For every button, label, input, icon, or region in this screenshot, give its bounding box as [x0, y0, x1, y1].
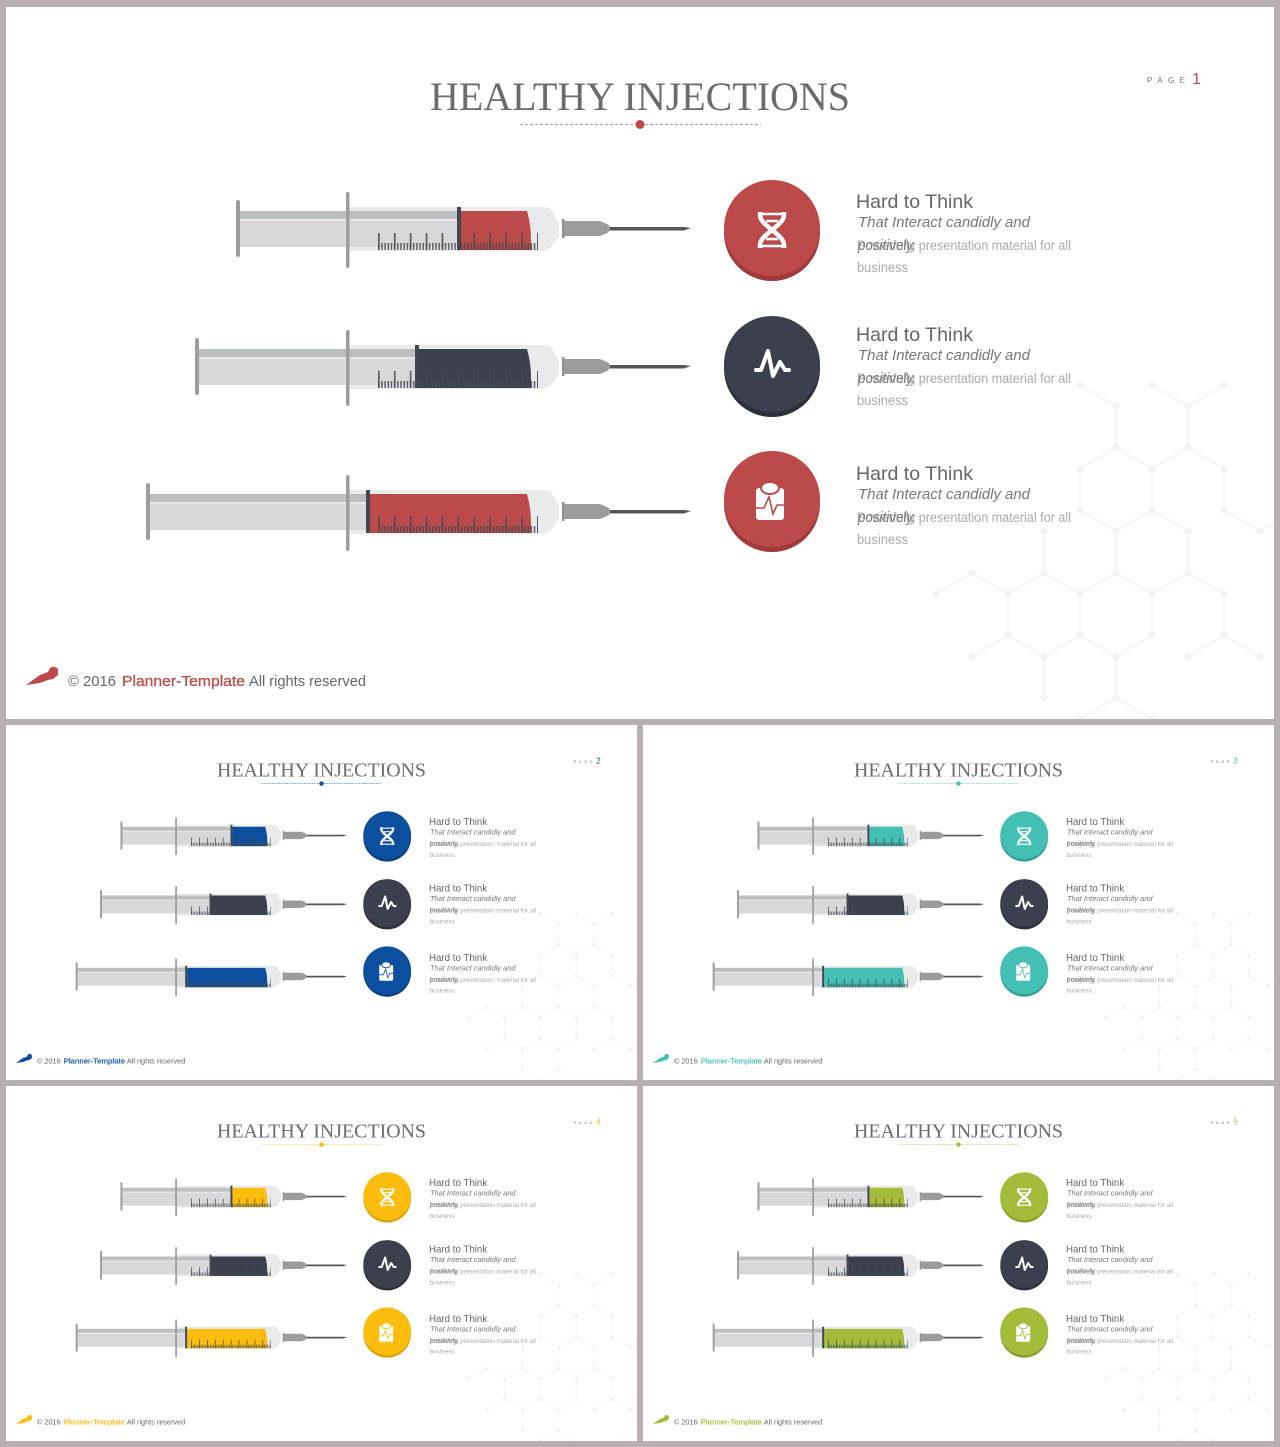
- footer: All rights reserved: [127, 1418, 185, 1427]
- text block 1: positively,: [857, 237, 916, 254]
- text block 2: business: [857, 393, 908, 408]
- text block 1: business: [429, 1213, 455, 1220]
- text block 2: positively,: [1066, 1266, 1096, 1275]
- text block 1: That Interact candidly and: [430, 828, 516, 837]
- footer: © 2016: [68, 673, 116, 690]
- page number: [1211, 1117, 1238, 1126]
- text block 3: business: [1066, 1349, 1092, 1356]
- icon: pulse circle: [363, 879, 411, 929]
- text block 2: Hard to Think: [429, 884, 487, 895]
- text block 1: positively,: [1066, 1200, 1096, 1209]
- text block 1: Hard to Think: [429, 1178, 487, 1189]
- icon: pulse circle: [363, 1240, 411, 1290]
- text block 3: Hard to Think: [856, 463, 973, 485]
- icon: pen logo: [16, 1054, 32, 1063]
- icon: pulse circle: [1000, 1240, 1048, 1290]
- title divider: [262, 781, 382, 786]
- page number: PAGE: [1211, 759, 1230, 764]
- syringe 2: [100, 1247, 347, 1285]
- syringe 3: [76, 1319, 347, 1357]
- icon: DNA circle: [724, 180, 820, 281]
- text block 2: That Interact candidly and: [430, 1255, 516, 1264]
- text block 1: Hard to Think: [429, 817, 487, 828]
- footer: [674, 1418, 822, 1427]
- text block 3: That Interact candidly and: [1067, 1324, 1153, 1333]
- hexagon molecule background: [1106, 913, 1275, 1080]
- text block 1: That Interact candidly and: [1067, 1189, 1153, 1198]
- footer: Planner-Template: [701, 1057, 762, 1066]
- text block 1: positively,: [429, 1200, 459, 1209]
- page number: 1: [1192, 71, 1201, 88]
- text block 1: business: [857, 260, 908, 275]
- title: HEALTHY INJECTIONS: [430, 74, 850, 119]
- text block 3: That Interact candidly and: [1067, 963, 1153, 972]
- text block 1: positively,: [1066, 839, 1096, 848]
- title: HEALTHY INJECTIONS: [217, 1120, 426, 1142]
- footer: Planner-Template: [122, 673, 245, 690]
- footer: © 2016: [674, 1057, 698, 1066]
- syringe 1: [236, 192, 691, 268]
- text block 3: positively,: [857, 509, 916, 526]
- text block 2: positively,: [429, 905, 459, 914]
- text block 2: business: [1066, 1279, 1092, 1286]
- icon: DNA circle: [363, 811, 411, 862]
- panel: slide 4 yellow: [6, 1086, 637, 1441]
- title: HEALTHY INJECTIONS: [854, 759, 1063, 781]
- text block 3: business: [429, 988, 455, 995]
- syringe 1: [120, 1178, 347, 1216]
- footer: © 2016: [37, 1057, 61, 1066]
- footer: [37, 1057, 185, 1066]
- syringe 3: [146, 475, 691, 551]
- syringe 3: [713, 958, 984, 996]
- text block 1: business: [1066, 852, 1092, 859]
- text block 1: Hard to Think: [856, 191, 973, 213]
- text block 3: positively,: [1066, 1336, 1096, 1345]
- icon: pen logo: [26, 667, 58, 685]
- title divider: [262, 1142, 382, 1147]
- text block 3: [1066, 953, 1173, 995]
- syringe 1: [757, 1178, 984, 1216]
- icon: DNA circle: [1000, 1172, 1048, 1223]
- text block 1: Powerfully presentation material for all: [1066, 841, 1173, 848]
- footer: [37, 1418, 185, 1427]
- icon: pen logo: [16, 1415, 32, 1424]
- panel: slide 5 green: [643, 1086, 1274, 1441]
- text block 3: [1066, 1314, 1173, 1356]
- footer: All rights reserved: [127, 1057, 185, 1066]
- text block 1: That Interact candidly and: [430, 1189, 516, 1198]
- text block 3: Powerfully presentation material for all: [429, 977, 536, 984]
- footer: [674, 1057, 822, 1066]
- text block 3: Hard to Think: [1066, 1314, 1124, 1325]
- page number: [1211, 756, 1238, 765]
- text block 2: business: [429, 918, 455, 925]
- page number: PAGE: [1211, 1120, 1230, 1125]
- icon: pen logo: [653, 1054, 669, 1063]
- hexagon molecule background: [469, 913, 638, 1080]
- page number: 3: [1233, 756, 1238, 765]
- text block 3: That Interact candidly and: [430, 963, 516, 972]
- text block 3: That Interact candidly and: [430, 1324, 516, 1333]
- syringe 2: [737, 1247, 984, 1285]
- icon: clipboard circle: [1000, 1307, 1048, 1358]
- page number: PAGE: [1147, 76, 1185, 85]
- text block 3: Powerfully presentation material for all: [429, 1338, 536, 1345]
- text block 2: Hard to Think: [1066, 884, 1124, 895]
- text block 2: Hard to Think: [429, 1245, 487, 1256]
- text block 1: [429, 817, 536, 859]
- text block 1: Powerfully presentation material for all: [857, 238, 1071, 253]
- text block 2: Powerfully presentation material for all: [1066, 1268, 1173, 1275]
- text block 1: [856, 191, 1071, 275]
- text block 2: Hard to Think: [1066, 1245, 1124, 1256]
- text block 1: That Interact candidly and: [858, 214, 1031, 231]
- footer: © 2016: [37, 1418, 61, 1427]
- text block 3: Hard to Think: [429, 953, 487, 964]
- text block 2: Powerfully presentation material for all: [429, 907, 536, 914]
- text block 3: business: [1066, 988, 1092, 995]
- text block 2: business: [1066, 918, 1092, 925]
- icon: clipboard circle: [363, 1307, 411, 1358]
- text block 3: [856, 463, 1071, 547]
- syringe 2: [737, 886, 984, 924]
- icon: DNA circle: [363, 1172, 411, 1223]
- text block 1: positively,: [429, 839, 459, 848]
- icon: clipboard circle: [1000, 946, 1048, 997]
- syringe 3: [713, 1319, 984, 1357]
- text block 2: [856, 324, 1071, 408]
- text block 2: Powerfully presentation material for all: [857, 371, 1071, 386]
- text block 2: business: [429, 1279, 455, 1286]
- footer: © 2016: [674, 1418, 698, 1427]
- title: HEALTHY INJECTIONS: [854, 1120, 1063, 1142]
- text block 2: positively,: [1066, 905, 1096, 914]
- text block 3: Hard to Think: [429, 1314, 487, 1325]
- text block 1: [1066, 1178, 1173, 1220]
- text block 2: [429, 1245, 536, 1286]
- text block 2: That Interact candidly and: [858, 347, 1031, 364]
- text block 1: [429, 1178, 536, 1220]
- text block 3: That Interact candidly and: [858, 486, 1031, 503]
- hexagon molecule background: [936, 385, 1276, 719]
- page number: [574, 1117, 601, 1126]
- text block 1: business: [1066, 1213, 1092, 1220]
- text block 2: [1066, 884, 1173, 925]
- icon: pen logo: [653, 1415, 669, 1424]
- text block 3: Powerfully presentation material for all: [857, 510, 1071, 525]
- footer: All rights reserved: [764, 1057, 822, 1066]
- text block 2: [1066, 1245, 1173, 1286]
- text block 2: positively,: [857, 370, 916, 387]
- text block 1: Powerfully presentation material for all: [429, 1202, 536, 1209]
- page number: 5: [1233, 1117, 1238, 1126]
- text block 2: Powerfully presentation material for all: [429, 1268, 536, 1275]
- text block 3: positively,: [429, 1336, 459, 1345]
- text block 2: positively,: [429, 1266, 459, 1275]
- text block 3: [429, 1314, 536, 1356]
- panel: slide 2 blue: [6, 725, 637, 1080]
- syringe 2: [100, 886, 347, 924]
- footer: All rights reserved: [764, 1418, 822, 1427]
- text block 3: Powerfully presentation material for all: [1066, 1338, 1173, 1345]
- text block 1: Hard to Think: [1066, 817, 1124, 828]
- text block 1: That Interact candidly and: [1067, 828, 1153, 837]
- text block 2: Hard to Think: [856, 324, 973, 346]
- text block 2: [429, 884, 536, 925]
- icon: DNA circle: [1000, 811, 1048, 862]
- syringe 1: [757, 817, 984, 855]
- footer: Planner-Template: [64, 1057, 125, 1066]
- icon: clipboard circle: [724, 451, 820, 552]
- title divider: [520, 120, 761, 129]
- title: HEALTHY INJECTIONS: [217, 759, 426, 781]
- hexagon molecule background: [469, 1274, 638, 1441]
- text block 1: Hard to Think: [1066, 1178, 1124, 1189]
- text block 3: [429, 953, 536, 995]
- page number: 4: [596, 1117, 601, 1126]
- footer: [68, 673, 366, 690]
- text block 3: positively,: [429, 975, 459, 984]
- text block 2: That Interact candidly and: [1067, 894, 1153, 903]
- icon: pulse circle: [1000, 879, 1048, 929]
- syringe 3: [76, 958, 347, 996]
- syringe 2: [195, 330, 691, 406]
- text block 3: business: [857, 532, 908, 547]
- footer: Planner-Template: [701, 1418, 762, 1427]
- text block 3: Hard to Think: [1066, 953, 1124, 964]
- icon: clipboard circle: [363, 946, 411, 997]
- syringe 1: [120, 817, 347, 855]
- text block 1: Powerfully presentation material for all: [429, 841, 536, 848]
- page number: [574, 756, 601, 765]
- footer: Planner-Template: [64, 1418, 125, 1427]
- icon: pulse circle: [724, 316, 820, 417]
- page number: 2: [596, 756, 601, 765]
- title divider: [899, 1142, 1019, 1147]
- title divider: [899, 781, 1019, 786]
- text block 1: Powerfully presentation material for all: [1066, 1202, 1173, 1209]
- text block 3: positively,: [1066, 975, 1096, 984]
- text block 2: Powerfully presentation material for all: [1066, 907, 1173, 914]
- page number: PAGE: [574, 759, 593, 764]
- text block 2: That Interact candidly and: [430, 894, 516, 903]
- text block 3: Powerfully presentation material for all: [1066, 977, 1173, 984]
- hexagon molecule background: [1106, 1274, 1275, 1441]
- text block 3: business: [429, 1349, 455, 1356]
- text block 2: That Interact candidly and: [1067, 1255, 1153, 1264]
- panel: slide 1 red: [6, 7, 1274, 719]
- text block 1: business: [429, 852, 455, 859]
- footer: All rights reserved: [249, 673, 366, 690]
- page number: [1147, 71, 1201, 88]
- panel: slide 3 teal: [643, 725, 1274, 1080]
- page number: PAGE: [574, 1120, 593, 1125]
- text block 1: [1066, 817, 1173, 859]
